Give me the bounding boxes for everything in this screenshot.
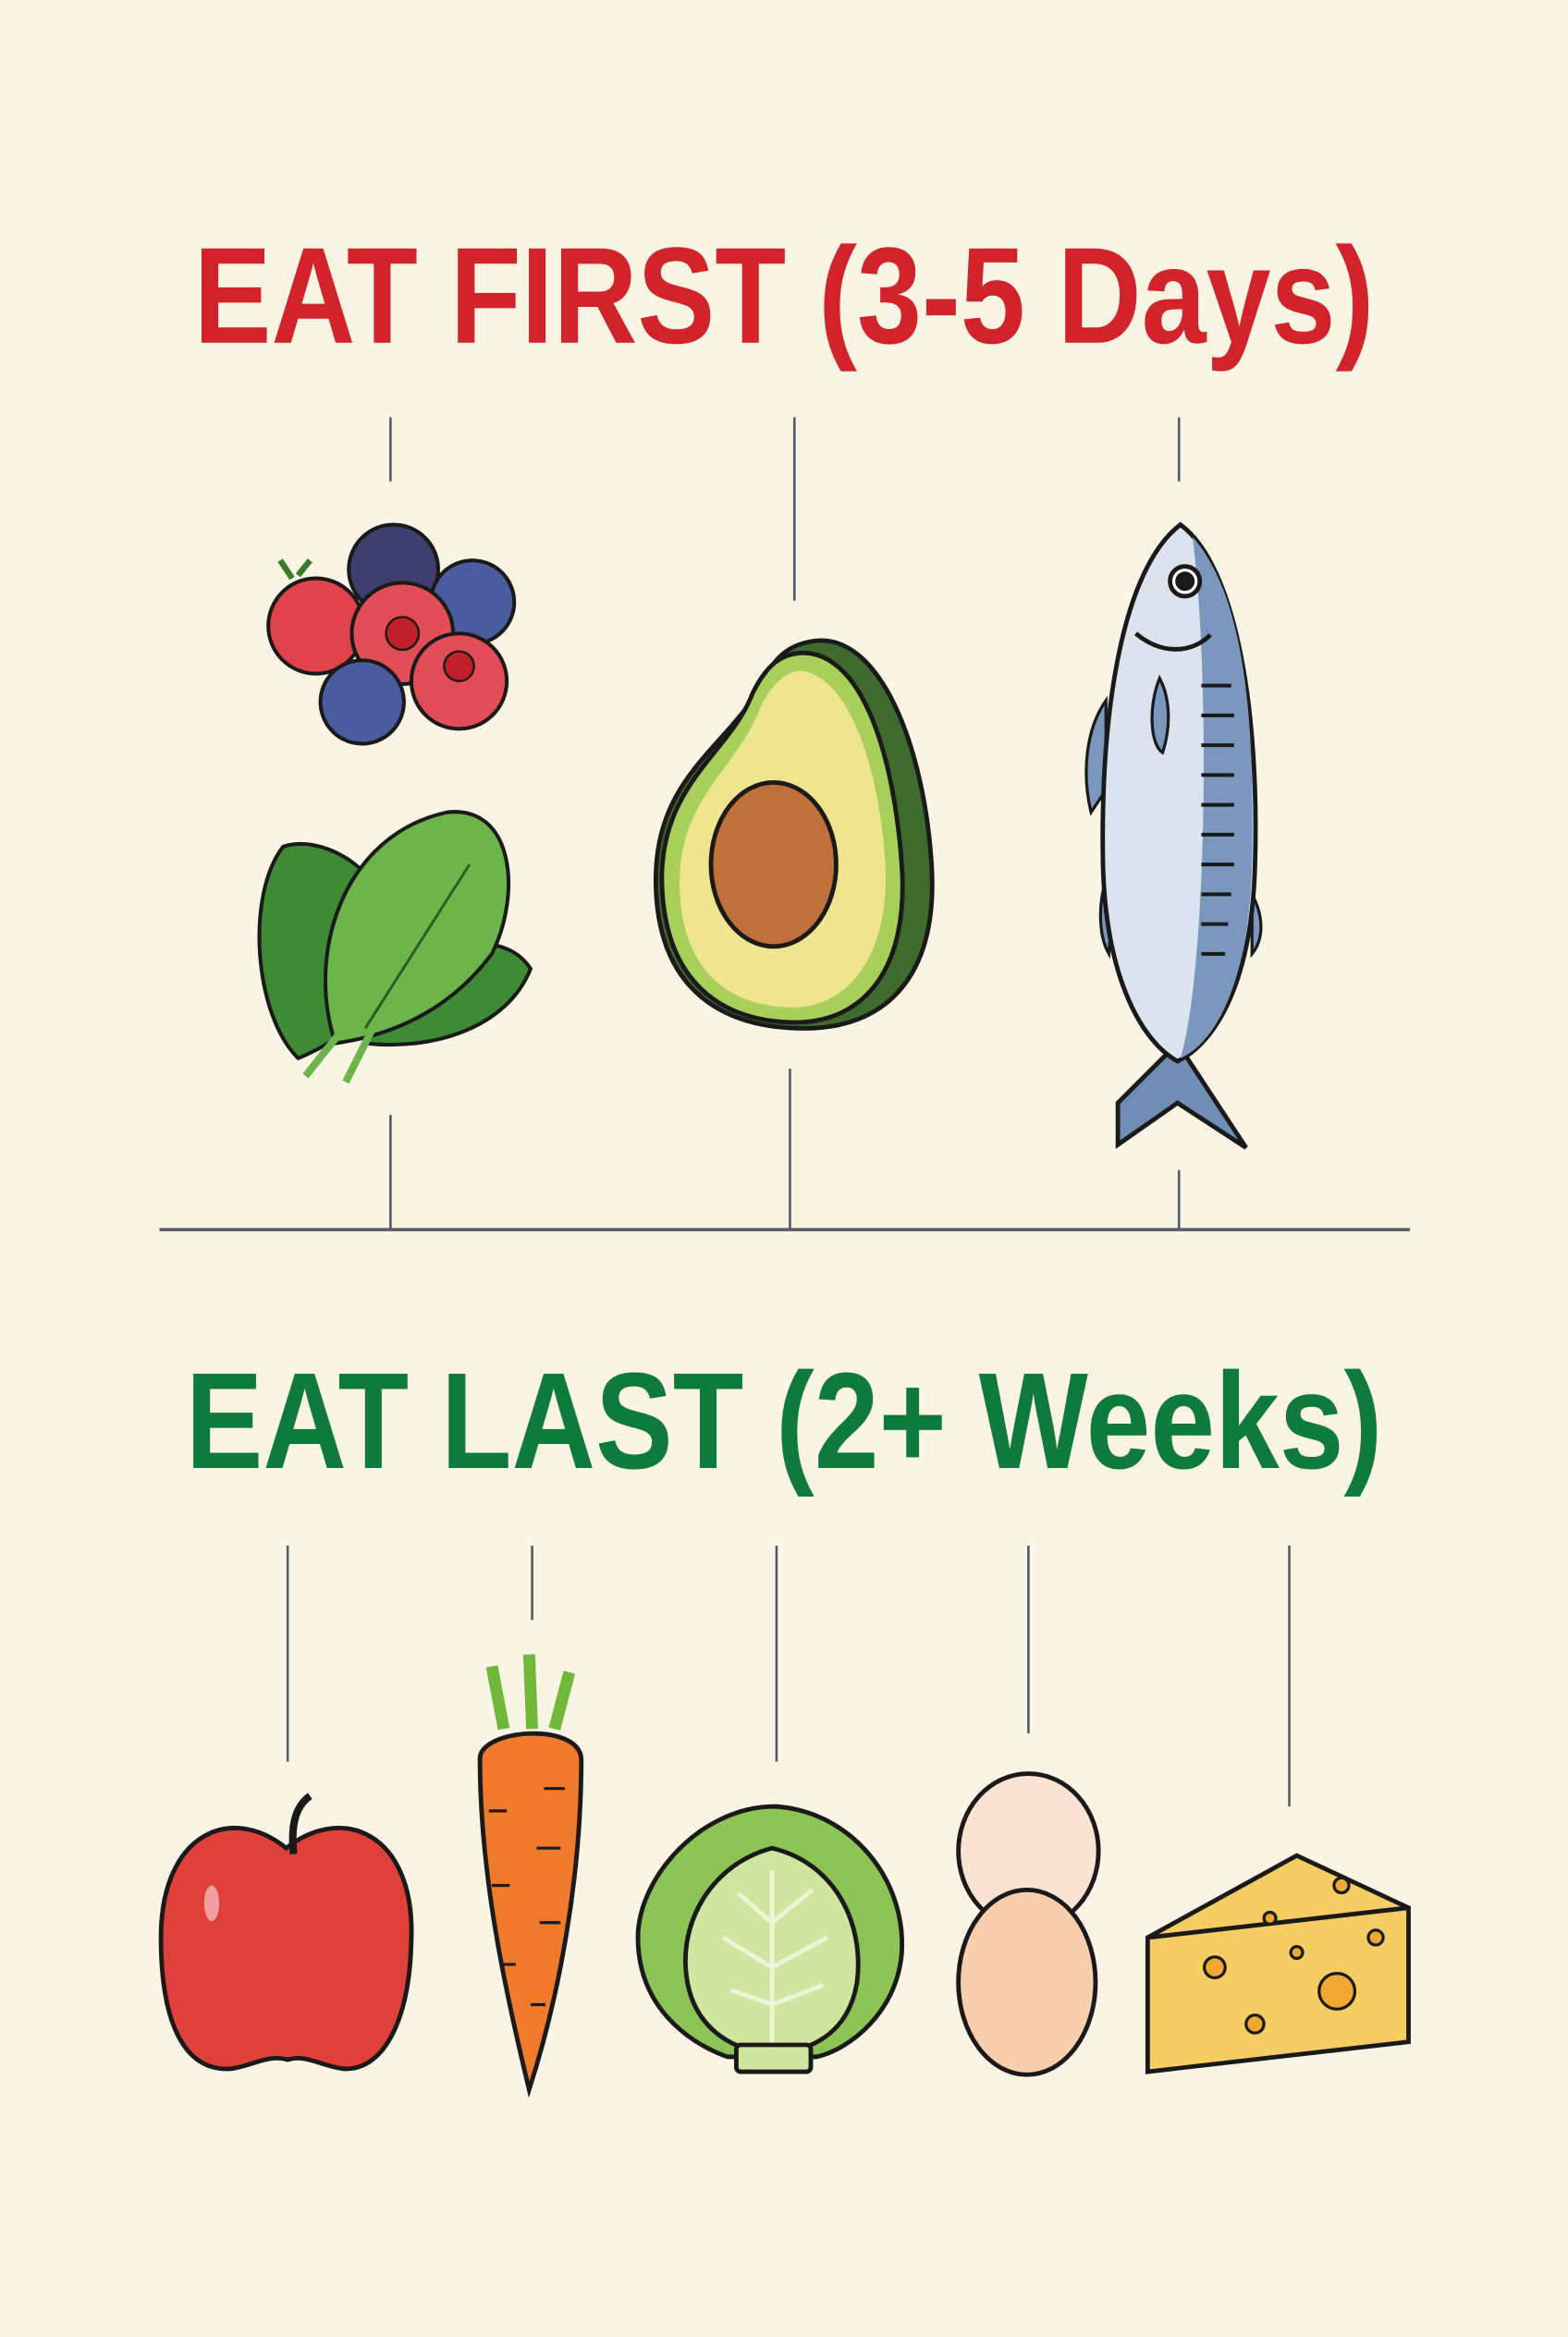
icon: apple: [161, 1796, 411, 2069]
icon: cabbage: [638, 1806, 902, 2072]
icon: eggs: [959, 1774, 1098, 2074]
icon: avocado: [655, 641, 932, 1028]
title: eat first: EAT FIRST (3-5 Days): [194, 220, 1374, 373]
icon: berries: [268, 525, 514, 744]
icon: fish: [1086, 525, 1261, 1147]
icon: carrot: [480, 1655, 582, 2089]
icon: cheese: [1147, 1855, 1408, 2072]
icon: spinach: [260, 812, 531, 1082]
title: eat last: EAT LAST (2+ Weeks): [186, 1345, 1382, 1498]
